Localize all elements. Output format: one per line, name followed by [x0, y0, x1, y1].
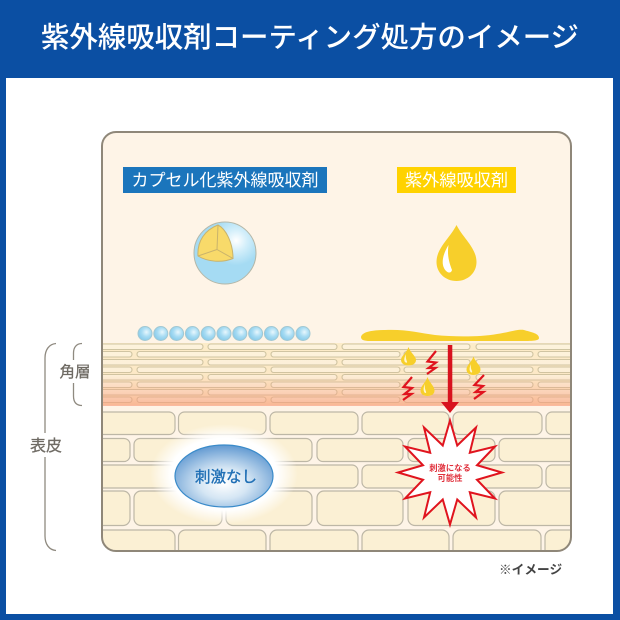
- bracket: epidermis: 表皮: [30, 437, 62, 455]
- no irritation glow oval: [150, 424, 298, 524]
- no irritation glow oval: 刺激なし: [195, 468, 257, 486]
- capsule beads: [138, 326, 310, 340]
- icon: capsule sphere: [194, 222, 256, 284]
- bracket: stratum corneum: 角層: [59, 363, 91, 381]
- starburst callout: 刺激になる: [429, 463, 471, 473]
- label: UV absorber: [397, 167, 516, 193]
- starburst callout: [398, 420, 502, 524]
- lightning bolts: [403, 351, 484, 400]
- panel: skin cross-section: [90, 132, 596, 560]
- bracket: stratum corneum: [59, 344, 91, 406]
- bracket: epidermis: [30, 344, 62, 550]
- red arrow: [441, 345, 459, 413]
- icon: oil drop: [436, 225, 476, 281]
- note: ※イメージ: [499, 563, 562, 577]
- label: encapsulated UV absorber: [123, 167, 327, 193]
- starburst callout: 可能性: [438, 473, 462, 483]
- label: UV absorber: 紫外線吸収剤: [405, 171, 508, 190]
- title: 紫外線吸収剤コーティング処方のイメージ: [41, 21, 579, 53]
- epidermis bricks: [103, 411, 570, 550]
- stratum corneum cells: [90, 343, 588, 405]
- oil film on skin: [361, 330, 539, 341]
- small oil drops: [401, 347, 480, 396]
- label: encapsulated UV absorber: カプセル化紫外線吸収剤: [132, 171, 318, 190]
